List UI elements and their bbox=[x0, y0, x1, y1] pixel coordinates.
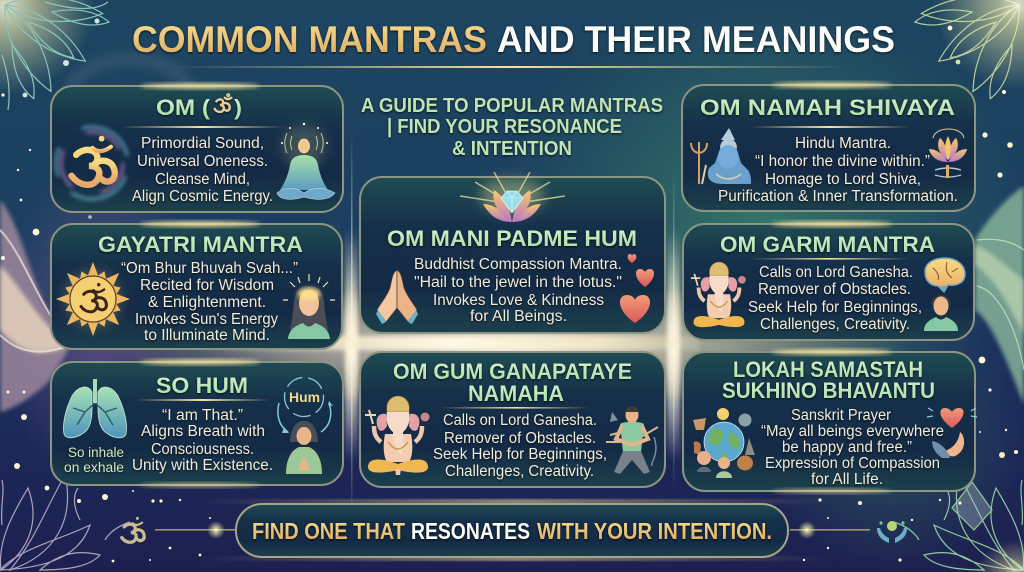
title: AND THEIR MEANINGS bbox=[497, 19, 895, 60]
footer banner: WITH YOUR INTENTION. bbox=[537, 518, 772, 544]
footer banner: RESONATES bbox=[411, 518, 530, 544]
text: shivaya: Hindu Mantra. bbox=[795, 135, 891, 152]
text: so hum: Unity with Existence. bbox=[132, 457, 273, 474]
text: lokah: for All Life. bbox=[811, 471, 883, 488]
icon: man bbox=[924, 295, 958, 331]
text: gayatri: & Enlightenment. bbox=[148, 294, 266, 311]
text: om mani bbox=[414, 256, 622, 325]
footer sparkle left bbox=[155, 521, 235, 539]
icon: praying hands bbox=[376, 270, 418, 324]
text: om gum bbox=[433, 412, 607, 480]
heading: om mani padme hum: OM MANI PADME HUM bbox=[387, 226, 637, 251]
text: lungs caption: on exhale bbox=[64, 460, 124, 475]
wave left bbox=[0, 200, 70, 412]
title underline bbox=[170, 66, 850, 68]
icon: hum breath cycle bbox=[278, 378, 333, 474]
heading: om gum bbox=[393, 359, 632, 406]
icon: brain bbox=[925, 258, 965, 292]
panel: om namah shivaya bbox=[682, 82, 975, 211]
text: gayatri: Invokes Sun's Energy bbox=[135, 311, 278, 328]
heading: so hum: SO HUM bbox=[156, 373, 248, 398]
icon: lungs bbox=[63, 379, 127, 438]
text: so hum: Consciousness. bbox=[151, 441, 254, 458]
text: shivaya bbox=[718, 135, 958, 205]
heading: garm: OM GARM MANTRA bbox=[720, 232, 935, 257]
glow: top right bbox=[934, 0, 1024, 90]
icon: om swirl bbox=[43, 114, 141, 212]
icon: small om bbox=[122, 517, 144, 542]
panel: om garm mantra bbox=[683, 222, 974, 340]
text: lokah: Expression of Compassion bbox=[765, 455, 940, 472]
panel: so hum bbox=[51, 360, 343, 487]
text: lokah bbox=[761, 407, 944, 488]
heading: lokah: SUKHINO BHAVANTU bbox=[722, 378, 935, 403]
text: om: Primordial Sound, bbox=[141, 135, 264, 152]
text: lungs caption bbox=[64, 445, 124, 475]
subtitle: A GUIDE TO POPULAR MANTRAS bbox=[361, 95, 663, 117]
text: om: Align Cosmic Energy. bbox=[132, 188, 273, 205]
glow: bottom right bbox=[974, 532, 1024, 572]
icon: warrior figure bbox=[606, 407, 658, 474]
icon: hearts bbox=[620, 254, 654, 323]
lotus outline: bottom right bbox=[894, 475, 1024, 570]
text: shivaya: Purification & Inner Transformation. bbox=[718, 188, 958, 205]
panel: om mani padme hum bbox=[360, 172, 665, 333]
subtitle: & INTENTION bbox=[452, 138, 572, 160]
text: garm: Seek Help for Beginnings, bbox=[748, 299, 922, 316]
text: so hum bbox=[132, 407, 273, 474]
icon: heart in hand bbox=[927, 408, 977, 458]
icon: shiva with trident bbox=[691, 128, 751, 184]
text: gayatri bbox=[121, 260, 298, 344]
panel: lokah samastah sukhino bhavantu bbox=[683, 350, 977, 493]
text: om gum: Seek Help for Beginnings, bbox=[433, 446, 607, 463]
text: om gum: Remover of Obstacles. bbox=[444, 430, 596, 447]
text: lokah: Sanskrit Prayer bbox=[791, 407, 891, 424]
lotus outline: bottom left bbox=[0, 475, 130, 570]
text: om: Universal Oneness. bbox=[137, 153, 268, 170]
text: gayatri: Recited for Wisdom bbox=[140, 277, 274, 294]
panel: om bbox=[43, 84, 343, 212]
footer banner: FIND ONE THAT bbox=[252, 518, 405, 544]
subtitle: | FIND YOUR RESONANCE bbox=[387, 116, 622, 138]
text: lungs caption: So inhale bbox=[68, 445, 124, 460]
text: om mani: "Hail to the jewel in the lotus." bbox=[414, 274, 622, 291]
text: om gum: Challenges, Creativity. bbox=[445, 463, 594, 480]
icon: hands holding circle bbox=[877, 521, 907, 543]
text: lokah: “May all beings everywhere bbox=[761, 423, 944, 440]
icon: ganesha bbox=[365, 396, 430, 475]
heading: lokah bbox=[722, 357, 935, 403]
text: lokah: be happy and free.” bbox=[782, 439, 912, 456]
heading: gayatri: GAYATRI MANTRA bbox=[98, 232, 303, 257]
icon: lotus with halo bbox=[929, 129, 967, 178]
wave right bbox=[975, 186, 1024, 405]
text: om mani: for All Beings. bbox=[470, 308, 567, 325]
heading: om gum: OM GUM GANAPATAYE bbox=[393, 359, 632, 384]
icon: earth with beings bbox=[693, 408, 755, 478]
panel: gayatri mantra bbox=[51, 222, 342, 349]
icon: lotus with diamond bbox=[460, 172, 565, 222]
title: COMMON MANTRAS bbox=[132, 19, 487, 60]
text: garm bbox=[748, 264, 922, 333]
text: so hum: Aligns Breath with bbox=[141, 423, 265, 440]
heading: om: OM ( bbox=[156, 95, 211, 120]
text: garm: Remover of Obstacles. bbox=[758, 281, 911, 298]
text: shivaya: “I honor the divine within.” bbox=[755, 153, 930, 170]
heading: om bbox=[156, 94, 242, 120]
heading: lokah: LOKAH SAMASTAH bbox=[733, 357, 923, 382]
heading: om gum: NAMAHA bbox=[468, 381, 564, 406]
icon: person with glowing mind bbox=[283, 274, 335, 339]
text: garm: Calls on Lord Ganesha. bbox=[759, 264, 913, 281]
heading: om: ) bbox=[234, 95, 242, 120]
icon: sun with om bbox=[56, 262, 130, 336]
text: garm: Challenges, Creativity. bbox=[760, 316, 910, 333]
panel: om gum ganapataye namaha bbox=[360, 352, 665, 487]
icon: ganesha bbox=[691, 262, 746, 327]
text: om mani: Buddhist Compassion Mantra. bbox=[414, 256, 622, 273]
text: om mani: Invokes Love & Kindness bbox=[433, 292, 604, 309]
text: om gum: Calls on Lord Ganesha. bbox=[443, 412, 597, 429]
heading: shivaya: OM NAMAH SHIVAYA bbox=[700, 95, 955, 120]
mandala: top right bbox=[914, 0, 1024, 101]
mandala: top left bbox=[0, 0, 110, 110]
text: gayatri: “Om Bhur Bhuvah Svah...” bbox=[121, 260, 298, 277]
icon: meditating figure bbox=[277, 123, 335, 199]
icon: hum breath cycle: Hum bbox=[289, 390, 320, 405]
text: shivaya: Homage to Lord Shiva, bbox=[765, 171, 921, 188]
text: gayatri: to Illuminate Mind. bbox=[144, 327, 270, 344]
title bbox=[132, 19, 895, 60]
text: so hum: “I am That.” bbox=[162, 407, 243, 424]
text: om: Cleanse Mind, bbox=[155, 171, 250, 188]
footer sparkle right bbox=[790, 521, 870, 539]
text: om bbox=[132, 135, 273, 205]
subtitle bbox=[361, 95, 663, 160]
footer banner bbox=[200, 500, 830, 560]
